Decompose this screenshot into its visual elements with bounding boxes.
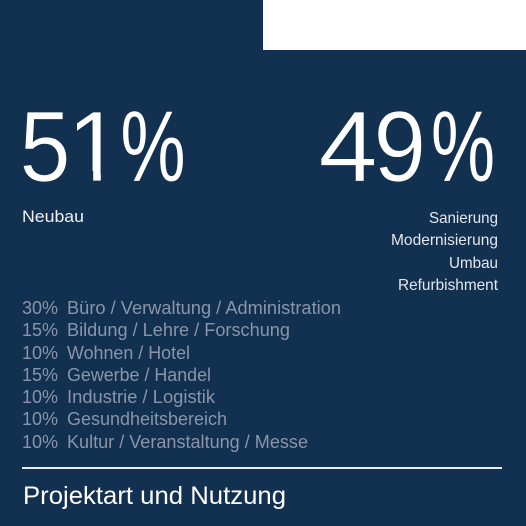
statistic: 51% Neubau xyxy=(20,91,186,226)
big number 51%: 1 xyxy=(67,91,123,203)
labels for refurbishment types xyxy=(391,210,499,294)
usage list: 10% xyxy=(22,432,58,452)
labels for refurbishment types: Modernisierung xyxy=(391,232,498,249)
big number 51%: % xyxy=(120,91,186,203)
usage list: 30% xyxy=(22,298,58,318)
big number 49%: 9 xyxy=(374,91,426,203)
usage list: Büro / Verwaltung / Administration xyxy=(67,298,341,318)
usage list: 15% xyxy=(22,320,58,340)
usage list: Gesundheitsbereich xyxy=(67,409,227,429)
usage list: Wohnen / Hotel xyxy=(67,343,190,363)
usage list: Gewerbe / Handel xyxy=(67,365,211,385)
usage list: 15% xyxy=(22,365,58,385)
usage list xyxy=(22,298,341,452)
usage list: Industrie / Logistik xyxy=(67,387,216,407)
big number 49%: 4 xyxy=(318,91,378,203)
usage list: Bildung / Lehre / Forschung xyxy=(67,320,290,340)
label Neubau: Neubau xyxy=(22,207,84,226)
usage list: 10% xyxy=(22,409,58,429)
statistic: 49% Sanierung xyxy=(318,91,499,294)
white corner block xyxy=(263,0,526,50)
footer title: Projektart und Nutzung xyxy=(23,482,286,510)
usage list: 10% xyxy=(22,387,58,407)
labels for refurbishment types: Sanierung xyxy=(429,210,498,227)
labels for refurbishment types: Umbau xyxy=(449,255,498,272)
big number 49%: % xyxy=(431,91,495,203)
usage list: Kultur / Veranstaltung / Messe xyxy=(67,432,308,452)
labels for refurbishment types: Refurbishment xyxy=(398,277,499,294)
big number 51% xyxy=(20,91,186,203)
big number 51%: 5 xyxy=(20,91,70,203)
usage list: 10% xyxy=(22,343,58,363)
big number 49% xyxy=(318,91,495,203)
